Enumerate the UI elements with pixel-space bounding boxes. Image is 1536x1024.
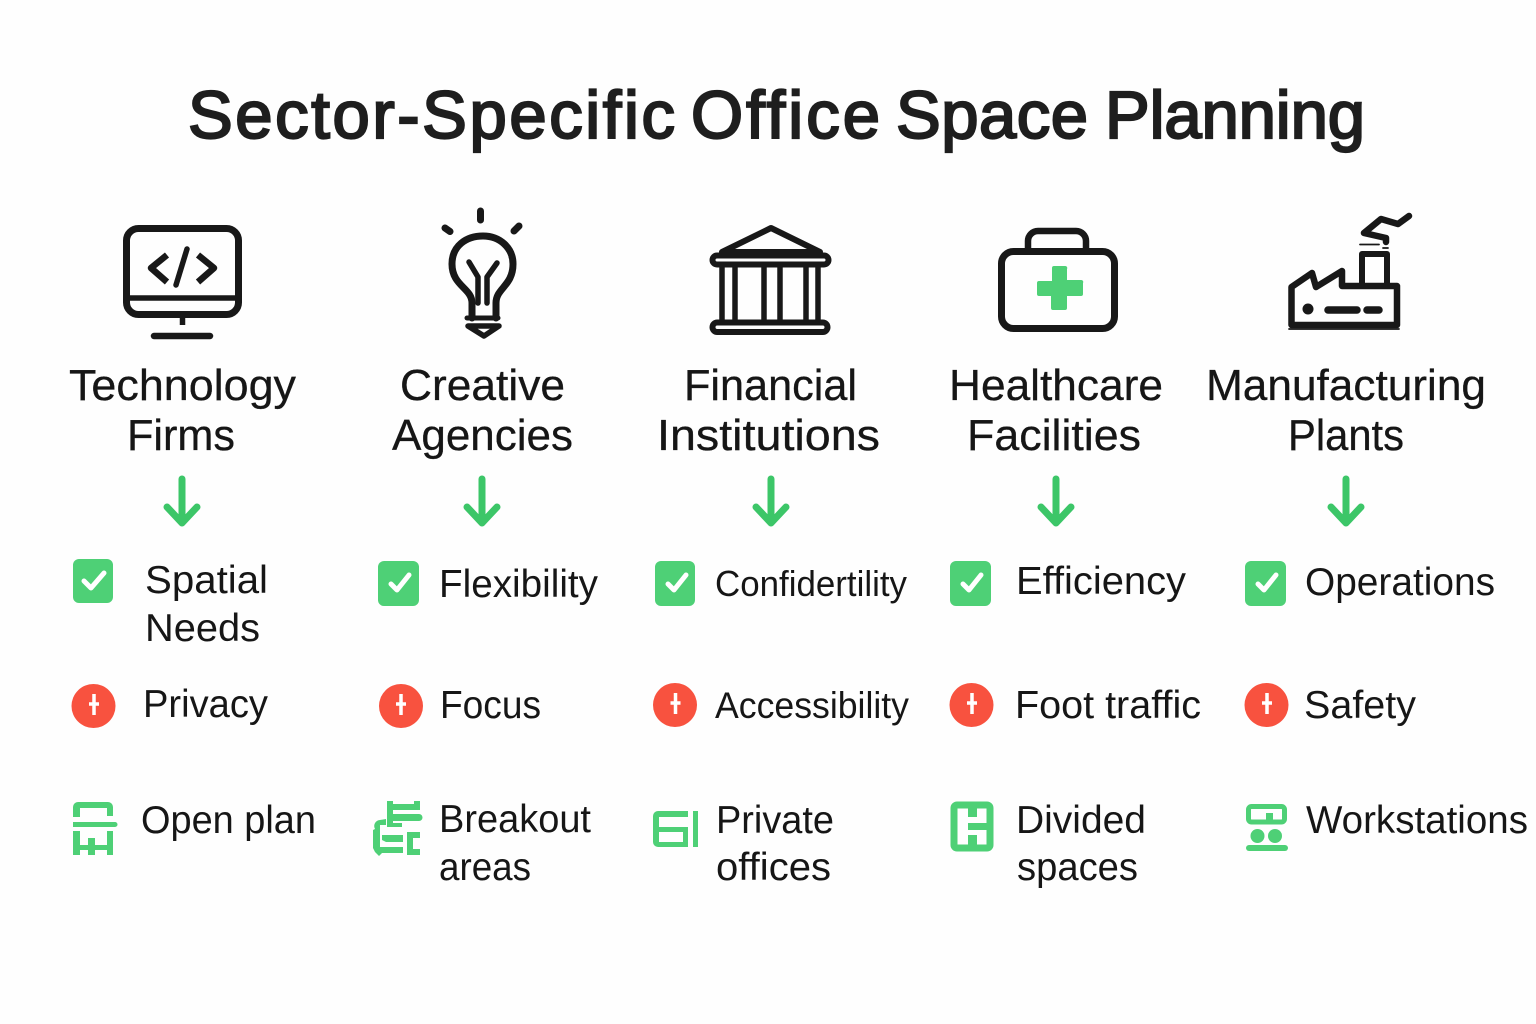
item: flexibility [378, 561, 598, 606]
arrow [467, 479, 497, 523]
item: confidertility: Confidertility [715, 563, 907, 604]
arrow [167, 479, 197, 523]
item: workstations [1246, 799, 1528, 851]
heading: creative agencies [392, 361, 573, 460]
item: focus: Focus [440, 684, 541, 727]
heading: manufacturing plants: Manufacturing [1206, 361, 1486, 410]
heading: financial institutions: Institutions [657, 411, 880, 460]
item: open plan: Open plan [141, 799, 316, 842]
item: spatial needs: Spatial [145, 559, 268, 602]
item: open plan [73, 799, 316, 855]
item: spatial needs [73, 559, 268, 650]
item: private offices: Private [716, 799, 834, 842]
heading: technology firms: Firms [127, 411, 235, 460]
arrow [1331, 479, 1361, 523]
item: private offices [653, 799, 834, 889]
heading: financial institutions [657, 361, 880, 460]
icon: light bulb [445, 211, 519, 336]
heading: manufacturing plants: Plants [1288, 411, 1404, 460]
item: divided spaces: spaces [1017, 846, 1138, 889]
heading: healthcare facilities [949, 361, 1163, 460]
item: safety: Safety [1304, 684, 1416, 727]
arrow [1041, 479, 1071, 523]
heading: manufacturing plants [1206, 361, 1486, 460]
item: foot traffic: Foot traffic [1015, 684, 1201, 727]
column: creative agencies [373, 211, 598, 889]
item: accessibility [653, 683, 909, 727]
icon: medical case [1002, 231, 1114, 328]
title: Sector-Specific [188, 78, 675, 153]
item: efficiency [950, 560, 1186, 606]
item: spatial needs: Needs [145, 607, 260, 650]
item: flexibility: Flexibility [439, 563, 598, 606]
icon: factory [1289, 216, 1409, 329]
item: breakout areas: Breakout [439, 798, 591, 841]
heading: healthcare facilities: Healthcare [949, 361, 1163, 410]
item: divided spaces [954, 799, 1146, 889]
item: accessibility: Accessibility [715, 685, 909, 726]
column: technology firms [69, 228, 316, 855]
heading: creative agencies: Creative [400, 361, 565, 410]
heading: healthcare facilities: Facilities [967, 411, 1141, 460]
title [188, 78, 1365, 153]
arrow [756, 479, 786, 523]
item: operations: Operations [1305, 561, 1495, 604]
title: Planning [1105, 78, 1365, 153]
heading: technology firms: Technology [69, 361, 296, 410]
heading: technology firms [69, 361, 296, 460]
title: Office [691, 78, 880, 153]
heading: financial institutions: Financial [684, 361, 857, 410]
title: Space [896, 78, 1088, 153]
item: breakout areas: areas [439, 846, 531, 889]
item: safety [1244, 683, 1416, 727]
icon: bank building [712, 228, 828, 332]
item: workstations: Workstations [1306, 799, 1528, 842]
heading: creative agencies: Agencies [392, 411, 573, 460]
item: privacy [72, 683, 268, 728]
item: confidertility [655, 561, 907, 606]
column: healthcare facilities [949, 231, 1201, 889]
item: privacy: Privacy [143, 683, 268, 726]
item: private offices: offices [716, 846, 831, 889]
icon: monitor with code [126, 228, 239, 336]
item: efficiency: Efficiency [1016, 560, 1186, 603]
item: focus [379, 684, 541, 728]
column: manufacturing plants [1206, 216, 1528, 851]
column: financial institutions [653, 228, 909, 889]
item: divided spaces: Divided [1016, 799, 1146, 842]
item: breakout areas [373, 798, 591, 889]
